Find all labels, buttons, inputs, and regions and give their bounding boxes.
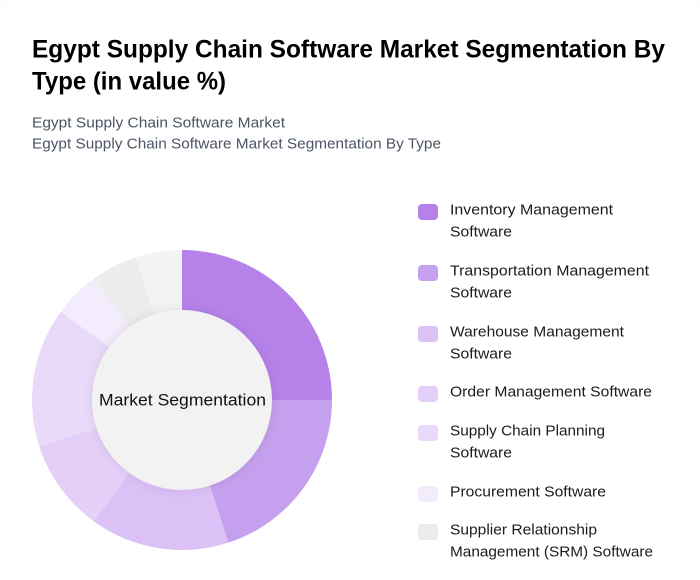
- title: Type (in value %): [32, 68, 226, 96]
- slice: inventory management: [182, 250, 332, 400]
- legend item: supplier relationship management: [418, 523, 653, 561]
- legend item: inventory management: [418, 203, 613, 241]
- title: [32, 36, 665, 96]
- legend item: supplier relationship management: Management (SRM) Software: [450, 545, 653, 561]
- legend item: transportation management: Transportation Management: [450, 264, 649, 280]
- legend item: supply chain planning: Supply Chain Planning: [450, 424, 605, 440]
- legend item: transportation management: Software: [450, 286, 512, 302]
- slice: supply chain planning: [32, 312, 182, 446]
- legend item: order management: Order Management Software: [450, 385, 652, 401]
- donut centre: [92, 310, 272, 490]
- slice: procurement: [61, 279, 182, 400]
- slice: other: [136, 250, 182, 400]
- title: Egypt Supply Chain Software Market Segmentation By: [32, 36, 665, 64]
- slice: supplier relationship management: [94, 257, 182, 400]
- legend: [418, 203, 653, 561]
- legend item: warehouse management: [418, 325, 624, 363]
- legend item: warehouse management: Software: [450, 347, 512, 363]
- legend item: transportation management: [418, 264, 649, 302]
- legend item: procurement: Procurement Software: [450, 485, 606, 501]
- legend item: inventory management: Inventory Management: [450, 203, 613, 219]
- legend item: warehouse management: Warehouse Management: [450, 325, 624, 341]
- subtitle: [32, 116, 441, 152]
- donut chart: [32, 250, 332, 550]
- slice: warehouse management: [94, 400, 228, 550]
- subtitle: Egypt Supply Chain Software Market Segmentation By Type: [32, 136, 441, 152]
- subtitle: Egypt Supply Chain Software Market: [32, 116, 285, 132]
- legend item: inventory management: Software: [450, 225, 512, 241]
- legend item: supply chain planning: Software: [450, 446, 512, 462]
- centre label: Market Segmentation: [99, 392, 266, 410]
- legend item: supplier relationship management: Supplier Relationship: [450, 523, 597, 539]
- slice: order management: [39, 400, 182, 521]
- legend item: supply chain planning: [418, 424, 605, 462]
- slice: transportation management: [182, 400, 332, 543]
